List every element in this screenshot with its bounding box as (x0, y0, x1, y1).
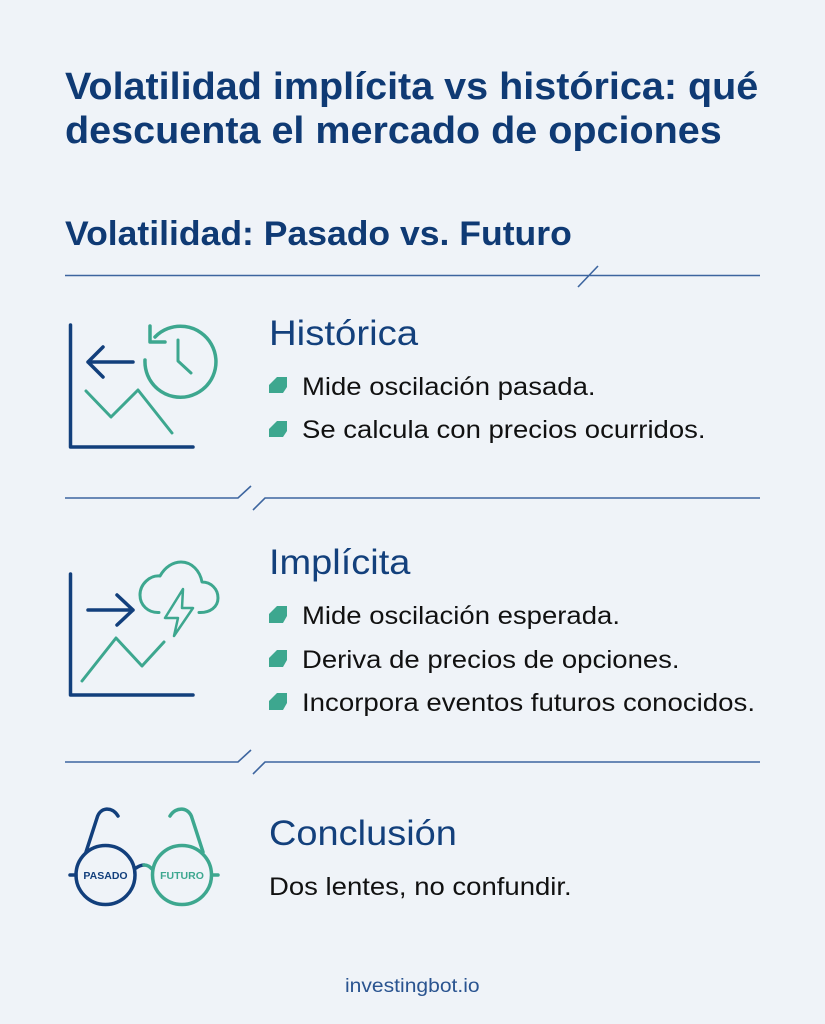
bullet list: Histórica: Mide oscilación pasada. (302, 373, 596, 401)
title: descuenta el mercado de opciones (65, 110, 722, 152)
icon: historical chart (70, 325, 216, 447)
bullet list: Histórica (269, 373, 706, 444)
title (65, 66, 758, 152)
heading: Conclusión: Conclusión (269, 814, 457, 853)
icon: implied chart (70, 562, 218, 695)
title: Volatilidad implícita vs histórica: qué (65, 66, 758, 108)
bullet list: Implícita: Incorpora eventos futuros conocidos. (302, 689, 755, 717)
section heading: Volatilidad: Pasado vs. Futuro (65, 215, 572, 253)
heading: Histórica: Histórica (269, 314, 418, 353)
bullet list: Implícita: Deriva de precios de opciones. (302, 646, 680, 674)
footer: investingbot.io (345, 975, 480, 997)
bullet list: Implícita (269, 602, 755, 717)
bullet list: Implícita: Mide oscilación esperada. (302, 602, 620, 630)
heading: Implícita: Implícita (269, 543, 410, 582)
icon: glasses: FUTURO (160, 870, 204, 882)
conclusion text: Dos lentes, no confundir. (269, 873, 572, 901)
bullet list: Histórica: Se calcula con precios ocurridos. (302, 416, 706, 444)
icon: glasses (70, 809, 218, 904)
icon: glasses: PASADO (83, 870, 128, 882)
